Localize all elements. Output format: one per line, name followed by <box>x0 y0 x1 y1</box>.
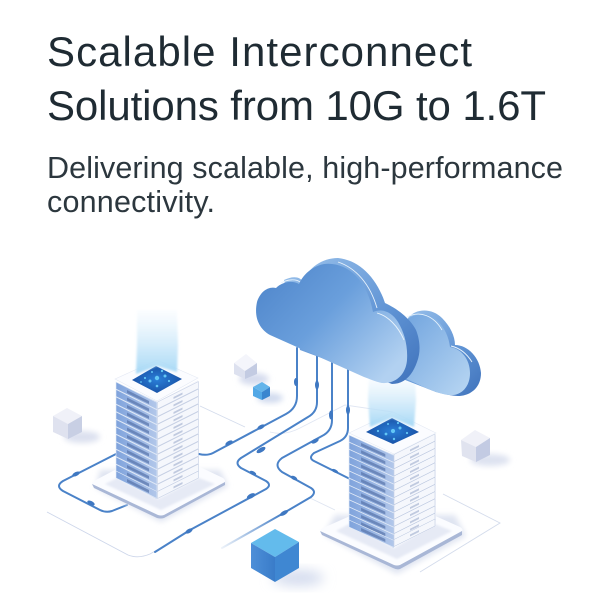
left face rows <box>349 435 394 548</box>
wire three fade <box>222 514 282 548</box>
cube: white right <box>461 430 510 466</box>
platform <box>320 497 466 574</box>
screen dots <box>140 370 170 387</box>
cube: white left <box>53 408 100 443</box>
cube: small blue <box>253 382 283 403</box>
platform shadow of tower <box>105 478 215 510</box>
cube: large blue <box>251 529 324 586</box>
right face rows <box>394 434 436 548</box>
subtitle: connectivity. <box>47 185 215 219</box>
subtitle: Delivering scalable, high-performance <box>47 151 563 185</box>
rear cloud <box>400 310 481 396</box>
main cloud side <box>284 258 420 384</box>
screen dots <box>377 422 408 440</box>
server two <box>320 375 466 574</box>
top face <box>349 412 436 454</box>
right face rows <box>157 380 198 499</box>
light beam <box>136 310 178 374</box>
server one <box>92 310 228 522</box>
wire nodes <box>72 378 350 535</box>
wire two <box>155 356 317 552</box>
top face <box>115 360 198 401</box>
wire one <box>199 348 297 455</box>
subtitle <box>47 151 563 219</box>
floor guide lines <box>47 405 500 572</box>
title: Solutions from 10G to 1.6T <box>47 82 546 129</box>
platform shadow of tower <box>336 524 452 559</box>
screen <box>366 418 419 444</box>
wires <box>59 348 350 552</box>
wire four <box>311 370 350 479</box>
title: Scalable Interconnect <box>47 28 472 75</box>
platform <box>92 447 228 522</box>
main cloud face <box>256 264 407 383</box>
screen <box>132 366 182 393</box>
light beam <box>368 375 416 427</box>
left face rows <box>116 382 157 499</box>
wire loop at server one <box>59 454 127 512</box>
wire three <box>278 363 332 514</box>
cloud <box>256 258 481 396</box>
title <box>47 28 546 129</box>
cloud highlights <box>281 262 404 340</box>
cube: small white near cloud <box>234 354 269 385</box>
